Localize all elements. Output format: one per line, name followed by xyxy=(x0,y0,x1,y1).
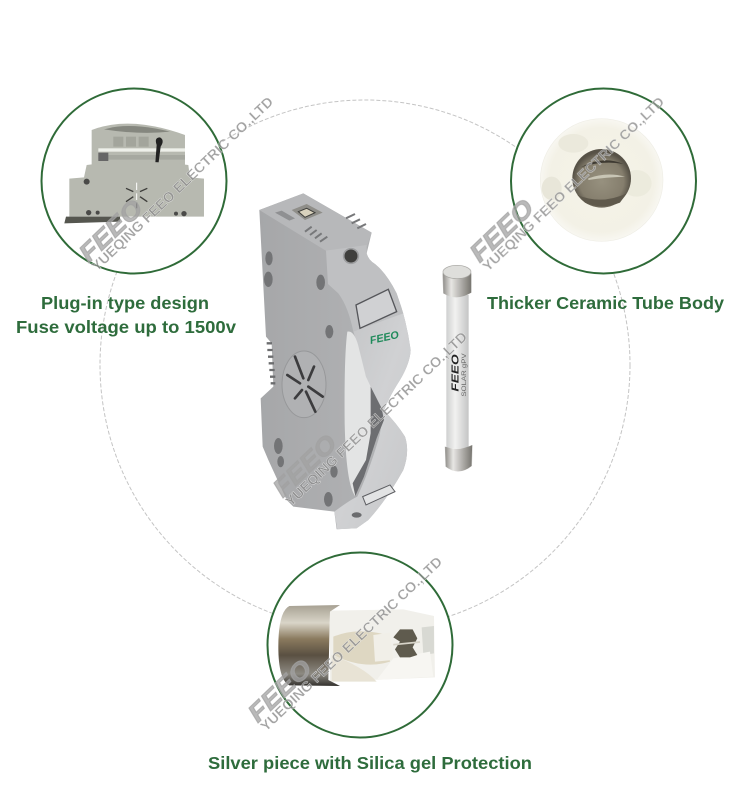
vents and screw hole xyxy=(305,214,366,242)
bottom clip xyxy=(363,485,395,505)
top socket xyxy=(292,204,323,220)
product: solar fuse xyxy=(443,265,472,471)
watermark: top left: YUEQING FEEO ELECTRIC CO.,LTD xyxy=(88,93,276,274)
photo: fuse holder opened xyxy=(64,124,204,223)
fuse rating label: SOLAR gPV xyxy=(461,352,468,397)
watermark: bottom: FEEO xyxy=(243,654,318,728)
top cap xyxy=(443,269,471,297)
heading: ceramic tube: Thicker Ceramic Tube Body xyxy=(487,293,724,313)
photo: silver piece with silica gel xyxy=(278,605,435,686)
fuse brand label: FEEO xyxy=(450,354,461,392)
side rosette xyxy=(282,351,326,418)
watermark: top left: FEEO xyxy=(74,194,149,268)
dashed orbit circle xyxy=(100,100,630,630)
side ribs xyxy=(267,343,275,383)
holder silhouette xyxy=(259,193,411,529)
release tab xyxy=(356,289,397,328)
fuse tube xyxy=(446,295,469,448)
circle: silver piece xyxy=(268,552,452,738)
watermark: top right: FEEO xyxy=(465,194,540,268)
top face xyxy=(259,193,372,252)
watermark: centre: YUEQING FEEO ELECTRIC CO.,LTD xyxy=(282,328,470,509)
bottom cap xyxy=(445,445,472,471)
watermark: top right: YUEQING FEEO ELECTRIC CO.,LTD xyxy=(479,93,667,274)
fuse window xyxy=(345,332,384,496)
hexagonal silver holes xyxy=(393,629,417,657)
cover band xyxy=(326,245,403,332)
heading: plug-in design: Plug-in type design xyxy=(41,293,209,313)
watermark: bottom: YUEQING FEEO ELECTRIC CO.,LTD xyxy=(257,553,445,734)
front cover xyxy=(334,313,411,529)
green logo on holder: FEEO xyxy=(369,329,401,347)
circle: ceramic tube body xyxy=(511,88,696,274)
circle: plug-in type design xyxy=(42,88,226,274)
product: fuse holder xyxy=(259,193,411,529)
watermark: centre: FEEO xyxy=(268,429,343,503)
heading: silver piece: Silver piece with Silica gel Protection xyxy=(208,753,532,773)
heading: fuse voltage: Fuse voltage up to 1500v xyxy=(16,317,236,337)
photo: ceramic tube cross-section xyxy=(540,119,663,241)
